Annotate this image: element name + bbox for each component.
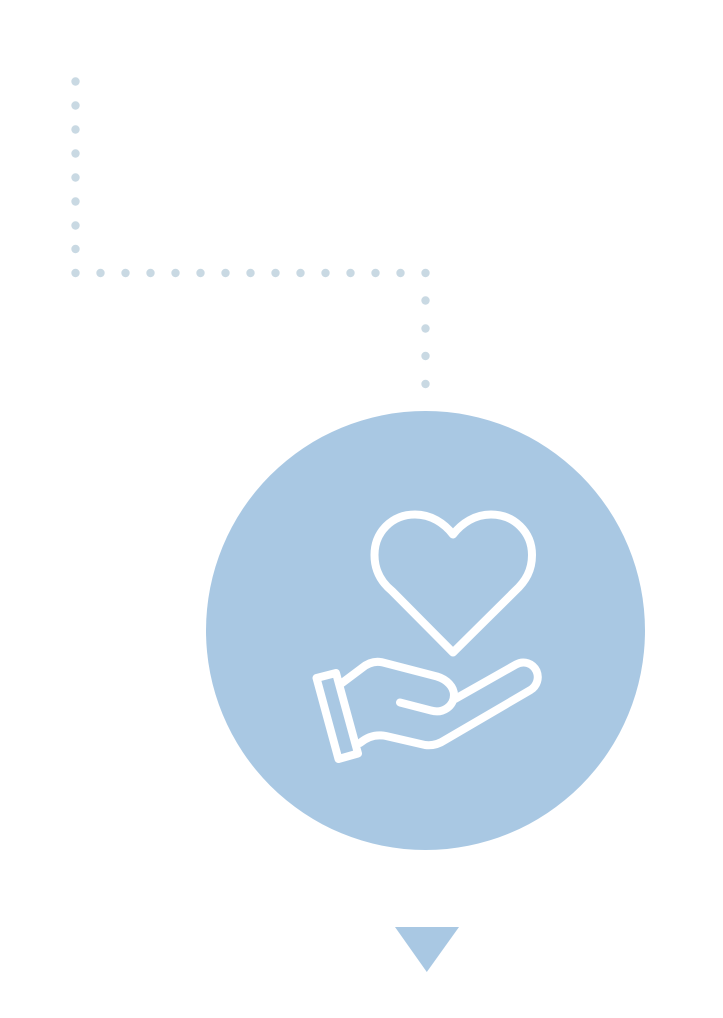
icon: heart bbox=[374, 514, 532, 652]
icon: hand bbox=[342, 662, 538, 745]
icon: heart in hand bbox=[316, 514, 538, 759]
icon: cuff bbox=[316, 673, 358, 759]
dotted connector line bbox=[71, 77, 430, 388]
downward triangle arrow bbox=[395, 927, 459, 972]
blue circle bbox=[206, 411, 645, 850]
